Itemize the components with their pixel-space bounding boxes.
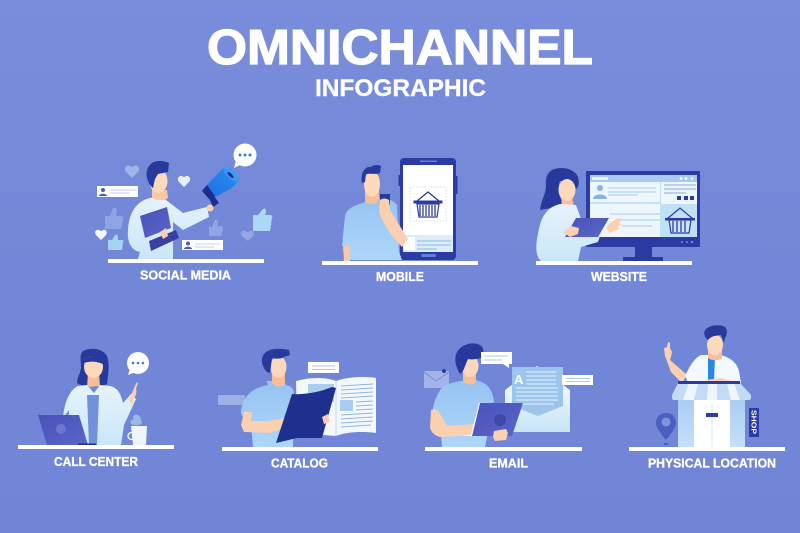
woman with tablet	[536, 168, 623, 261]
panel: social media	[95, 144, 272, 282]
icon: shop building	[672, 381, 751, 447]
label: mobile: MOBILE	[376, 269, 424, 284]
basket	[665, 208, 695, 233]
note right	[562, 375, 593, 385]
man with laptop	[430, 343, 494, 447]
note top	[481, 352, 512, 368]
man reading	[241, 349, 294, 447]
person with megaphone	[128, 161, 209, 259]
person with phone	[342, 165, 408, 261]
label: call center: CALL CENTER	[54, 454, 139, 469]
subtitle: INFOGRAPHIC	[315, 75, 486, 102]
panel: call center	[18, 349, 174, 469]
basket with dotted frame	[410, 187, 446, 221]
left note	[218, 395, 245, 405]
icon: smartphone	[398, 158, 458, 260]
icon: laptop	[462, 403, 523, 441]
icon: speech bubble	[127, 352, 149, 375]
panel: email	[424, 343, 593, 470]
title: OMNICHANNEL	[207, 21, 593, 75]
icon: laptop	[38, 415, 96, 445]
panel: mobile	[322, 158, 478, 284]
open book	[296, 377, 376, 436]
panel: website	[536, 168, 700, 284]
label: physical location: PHYSICAL LOCATION	[648, 456, 776, 470]
label: social media: SOCIAL MEDIA	[140, 268, 232, 282]
small envelope	[424, 369, 449, 388]
icon: hearts and thumbs	[95, 165, 272, 250]
shelf	[536, 261, 692, 265]
top note	[308, 362, 339, 373]
shelf	[425, 447, 582, 451]
panel: catalog	[218, 349, 378, 470]
icon: speech bubble	[234, 144, 256, 168]
shelf	[108, 259, 264, 263]
label: catalog: CATALOG	[271, 456, 328, 470]
envelope with letter	[505, 366, 570, 432]
shopkeeper	[664, 325, 742, 393]
icon: coffee cup	[128, 415, 147, 445]
profile card left	[97, 186, 138, 197]
product card	[403, 235, 453, 252]
shelf	[322, 261, 478, 265]
catalog cover	[276, 387, 336, 443]
woman with headset	[63, 349, 138, 445]
icon: location pin	[656, 413, 676, 445]
shelf	[222, 447, 378, 451]
panel: physical location	[629, 325, 785, 470]
shop sign: SHOP	[750, 410, 758, 434]
icon: megaphone	[202, 164, 241, 212]
label: email: EMAIL	[489, 456, 528, 470]
shelf	[18, 445, 174, 449]
shelf	[629, 447, 785, 451]
envelope with letter: A	[514, 372, 524, 387]
icon: desktop monitor	[586, 171, 700, 261]
shop sign	[749, 408, 759, 437]
label: website: WEBSITE	[591, 269, 647, 284]
profile card right	[182, 240, 223, 250]
